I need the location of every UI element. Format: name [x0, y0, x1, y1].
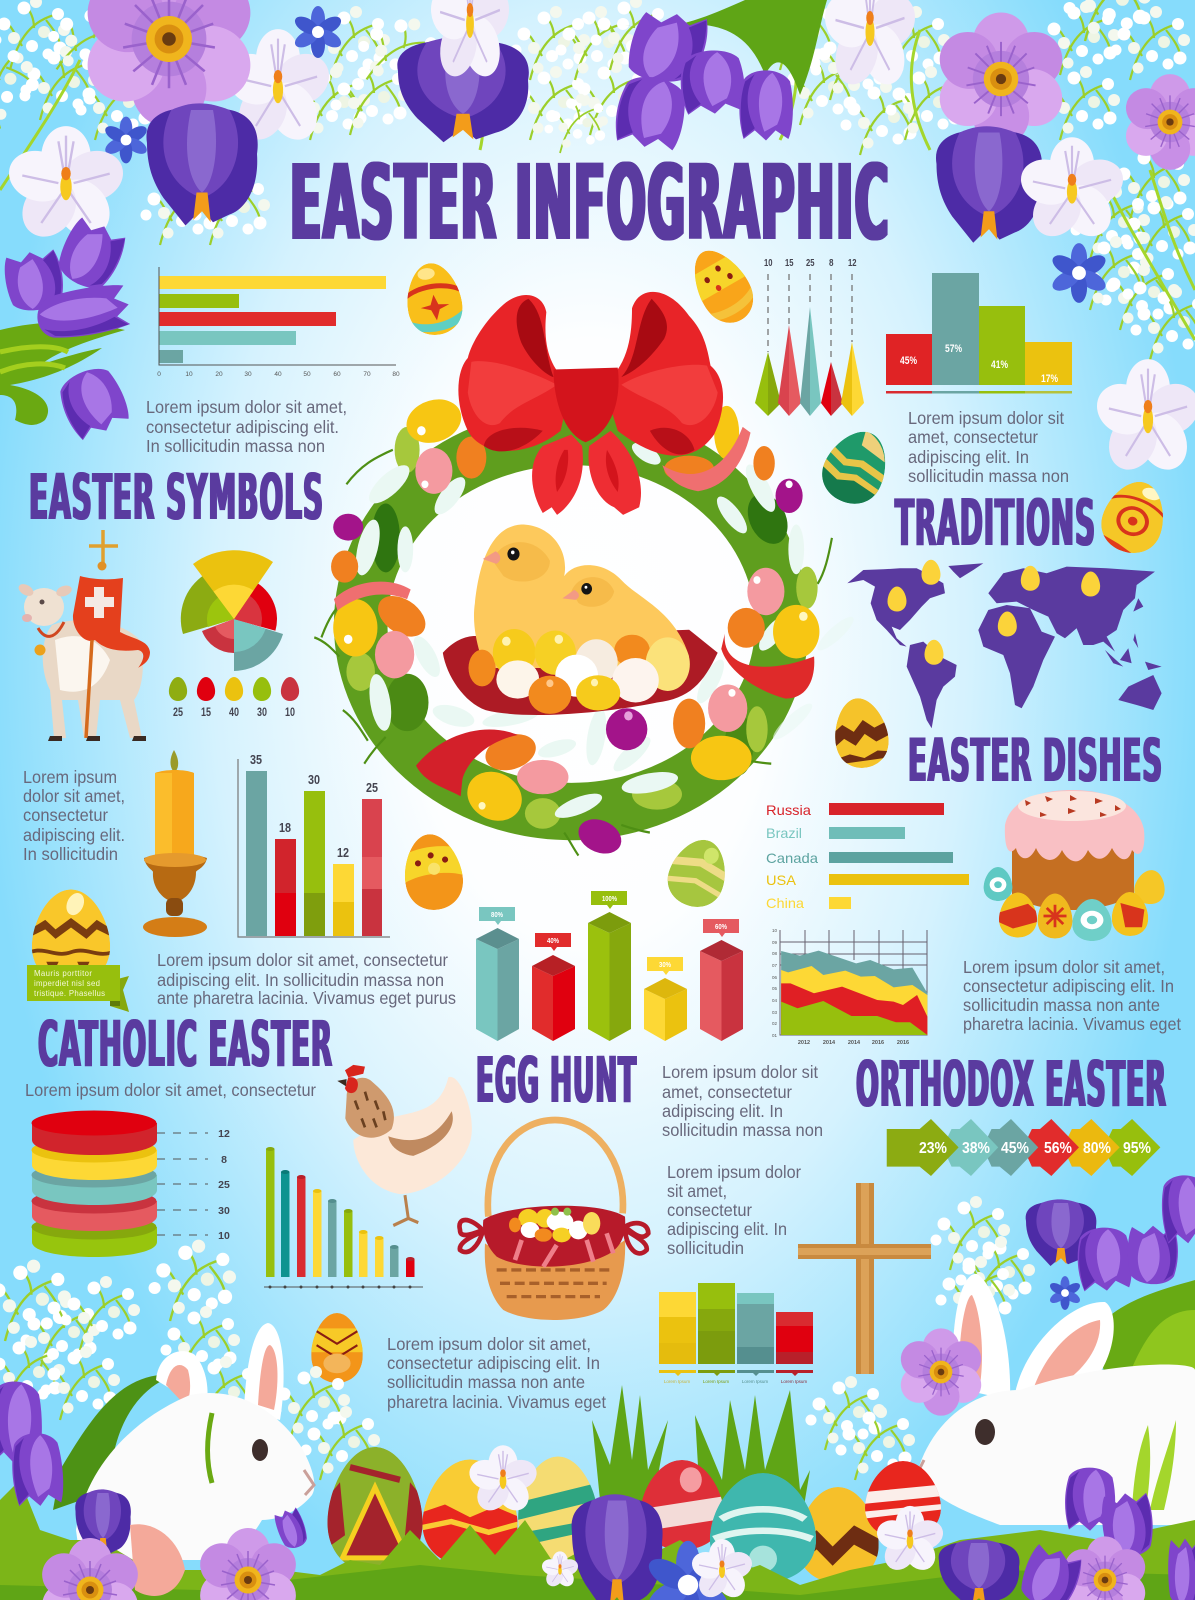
text block: left of candle: adipiscing elit.	[23, 825, 125, 845]
flowers: bottom centre and right	[540, 1468, 1195, 1600]
icon: lamb with banner	[17, 530, 150, 741]
bar chart: top left horizontal bars: 10	[185, 371, 193, 378]
text block: right of area chart: pharetra lacinia. Vivamus eget	[963, 1014, 1181, 1034]
chart: stacked area	[772, 928, 927, 1046]
icon: gold egg with ribbon label: Mauris porttitor	[34, 969, 92, 978]
pie chart	[181, 550, 283, 671]
illustration: easter cake with eggs	[984, 790, 1168, 941]
chart: percentage arrows: 80%	[1083, 1140, 1111, 1157]
bar chart: countries: China	[766, 895, 804, 911]
chart: stacked discs: 30	[218, 1205, 230, 1217]
chart: percentage arrows: 45%	[1001, 1140, 1029, 1157]
chart: stacked area: 2016	[897, 1040, 909, 1046]
bar chart: lower stacked columns: Lorem Ipsum	[742, 1379, 768, 1384]
egg: orange star	[408, 263, 462, 335]
egg: green diamond	[328, 1447, 422, 1573]
text block: right of area chart: Lorem ipsum dolor sit amet,	[963, 957, 1165, 977]
egg: orange flower	[404, 834, 463, 910]
chart: 3D percentage columns	[476, 891, 743, 1041]
chart: stacked area: 10	[772, 928, 777, 933]
chart: percentage arrows	[887, 1119, 1160, 1176]
rabbit: left	[76, 1323, 314, 1560]
bar chart: countries	[766, 802, 969, 911]
lily of the valley: right	[806, 1196, 1035, 1480]
text block: top left: Lorem ipsum dolor sit amet,	[146, 397, 347, 417]
grass band	[0, 1480, 1195, 1600]
text block: top right: amet, consectetur	[908, 427, 1038, 447]
text block: left of candle: In sollicitudin	[23, 844, 118, 864]
pyramid chart: 25	[806, 257, 815, 269]
egg: red	[642, 1460, 722, 1548]
text block: left of candle: Lorem ipsum	[23, 767, 117, 787]
chart: stacked area: 2014	[848, 1040, 861, 1046]
pyramid chart: 12	[848, 257, 857, 269]
text block: beside cross: sit amet,	[667, 1181, 727, 1201]
text block: under candle chart: Lorem ipsum dolor sit amet, consectetur	[157, 950, 448, 970]
egg: yellow red	[422, 1460, 518, 1559]
text block: top right: sollicitudin massa non	[908, 466, 1069, 486]
text block: top left: In sollicitudin massa non	[146, 436, 325, 456]
chart: stacked area: 2016	[872, 1040, 884, 1046]
bar chart: lower stacked columns: Lorem Ipsum	[664, 1379, 690, 1384]
bar chart: percentage blocks: 17%	[1041, 373, 1058, 385]
chart: stacked discs: 10	[218, 1230, 230, 1242]
text block: beside cross: Lorem ipsum dolor	[667, 1162, 801, 1182]
egg: orange dots	[694, 250, 754, 323]
bar chart: five bars with values	[238, 752, 390, 937]
tall grass	[592, 1385, 810, 1530]
bar chart: percentage blocks: 45%	[900, 355, 917, 367]
icon: hen	[337, 1065, 472, 1226]
chart: 3D percentage columns: 40%	[547, 938, 560, 945]
icon: gold egg with ribbon label: tristique. Phasellus	[34, 989, 105, 998]
pyramid chart	[755, 257, 864, 416]
leaves: top centre	[625, 0, 827, 95]
chart: stacked area: 2012	[798, 1040, 810, 1046]
legend: small eggs: 40	[229, 705, 239, 719]
egg: small orange lower left	[310, 1313, 364, 1383]
legend: small eggs: 30	[257, 705, 267, 719]
chart: stacked area: 04	[772, 998, 777, 1003]
chart: 3D percentage columns: 80%	[491, 912, 504, 919]
wreath ring	[361, 436, 782, 812]
bar chart: top left horizontal bars: 50	[303, 371, 311, 378]
text block: right of egg hunt: Lorem ipsum dolor sit	[662, 1062, 818, 1082]
decoration: tulips left	[0, 214, 134, 443]
bar chart: lower stacked columns: Lorem Ipsum	[703, 1379, 729, 1384]
bar chart: countries: USA	[766, 872, 797, 888]
bar chart: lower stacked columns	[659, 1283, 813, 1384]
illustration: basket	[459, 1120, 648, 1320]
egg: brown zigzag	[835, 698, 889, 768]
chart: stacked discs	[32, 1110, 230, 1257]
chart: percentage arrows: 23%	[919, 1140, 947, 1157]
bar chart: top left horizontal bars: 80	[392, 371, 400, 378]
flowers: bottom left	[0, 1382, 311, 1600]
decoration: right flowers	[1049, 243, 1195, 480]
text block: left of candle: consectetur	[23, 805, 108, 825]
chart: stacked area: 01	[772, 1033, 777, 1038]
legend: small eggs	[169, 677, 299, 719]
bar chart: top left horizontal bars: 30	[244, 371, 252, 378]
text: EGG HUNT	[476, 1044, 637, 1117]
white leaves	[351, 438, 857, 823]
flower: white crocus	[465, 1445, 541, 1517]
legend: small eggs: 15	[201, 705, 211, 719]
bar chart: top left horizontal bars: 60	[333, 371, 341, 378]
legend: small eggs: 10	[285, 705, 295, 719]
pyramid chart: 15	[785, 257, 794, 269]
chart: stacked area: 09	[772, 940, 777, 945]
icon: wooden cross	[798, 1183, 931, 1374]
chart: descending thin bars	[264, 1147, 423, 1287]
chart: stacked area: 07	[772, 963, 777, 968]
text block: bottom centre: sollicitudin massa non ante	[387, 1372, 585, 1392]
icon: gold egg with ribbon label	[27, 890, 129, 1012]
text block: right of egg hunt: sollicitudin massa non	[662, 1120, 823, 1140]
chart: stacked area: 02	[772, 1021, 777, 1026]
egg: yellow brown	[804, 1487, 879, 1580]
chicks	[474, 524, 689, 668]
icon: gold egg with ribbon label: imperdiet nisl sed	[34, 979, 100, 988]
bar chart: countries: Canada	[766, 850, 818, 866]
text block: under candle chart: ante pharetra lacinia. Vivamus eget purus	[157, 988, 456, 1008]
legend: small eggs: 25	[173, 705, 183, 719]
chart: 3D percentage columns: 100%	[602, 896, 618, 903]
bar chart: five bars with values: 35	[250, 752, 262, 767]
chart: stacked area: 2014	[823, 1040, 836, 1046]
text block: right of egg hunt: amet, consectetur	[662, 1082, 792, 1102]
text block: left of candle: dolor sit amet,	[23, 786, 125, 806]
decoration: top floral border	[0, 0, 1195, 360]
pyramid chart: 8	[829, 257, 834, 269]
bottom eggs	[328, 1447, 943, 1583]
bar chart: five bars with values: 25	[366, 780, 378, 795]
bar chart: top left horizontal bars: 70	[363, 371, 371, 378]
text block: right of area chart: consectetur adipiscing elit. In	[963, 976, 1174, 996]
bar chart: top left horizontal bars	[157, 267, 400, 378]
text block: beside cross: sollicitudin	[667, 1238, 744, 1258]
bar chart: top left horizontal bars: 40	[274, 371, 282, 378]
text block: beside cross: consectetur	[667, 1200, 752, 1220]
bar chart: countries: Brazil	[766, 825, 802, 841]
chart: 3D percentage columns: 60%	[715, 924, 728, 931]
text block: right of area chart: sollicitudin massa non ante	[963, 995, 1160, 1015]
text block: top right: Lorem ipsum dolor sit	[908, 408, 1064, 428]
egg: green pattern	[822, 432, 886, 504]
eggs in nest	[469, 629, 690, 714]
chart: stacked discs: 12	[218, 1128, 230, 1140]
text block: bottom centre: pharetra lacinia. Vivamus eget	[387, 1392, 606, 1412]
chart: stacked discs: 25	[218, 1179, 230, 1191]
text block: beside cross: adipiscing elit. In	[667, 1219, 787, 1239]
chart: percentage arrows: 38%	[962, 1140, 990, 1157]
illustration: wreath with chicks	[314, 292, 857, 860]
egg: yellow heart	[1101, 482, 1163, 553]
wreath eggs	[331, 393, 819, 860]
egg: teal	[710, 1473, 816, 1583]
bar chart: top left horizontal bars: 20	[215, 371, 223, 378]
chart: stacked area: 06	[772, 975, 777, 980]
chart: stacked area: 08	[772, 951, 777, 956]
chart: percentage arrows: 95%	[1123, 1140, 1151, 1157]
text block: catholic easter intro: Lorem ipsum dolor sit amet, consectetur	[25, 1080, 316, 1100]
chart: stacked area: 05	[772, 986, 777, 991]
chart: stacked area: 03	[772, 1010, 777, 1015]
bar chart: five bars with values: 18	[279, 820, 291, 835]
wreath ribbons	[334, 582, 814, 796]
lily of the valley: left	[0, 1240, 380, 1480]
flowers: right group	[894, 1173, 1195, 1416]
chart: percentage arrows: 56%	[1044, 1140, 1072, 1157]
bar chart: five bars with values: 12	[337, 845, 349, 860]
foliage patches	[314, 427, 832, 856]
eggs: decorated, scattered	[310, 239, 1176, 1383]
leaves: right tulips	[1095, 1280, 1195, 1400]
world map	[847, 560, 1162, 728]
bar chart: top left horizontal bars: 0	[157, 371, 161, 378]
icon: candle	[143, 750, 207, 937]
text block: top right: adipiscing elit. In	[908, 447, 1029, 467]
bar chart: countries: Russia	[766, 802, 811, 818]
rabbit: right	[918, 1274, 1195, 1525]
text block: right of egg hunt: adipiscing elit. In	[662, 1101, 783, 1121]
text block: under candle chart: adipiscing elit. In sollicitudin massa non	[157, 970, 444, 990]
bar chart: percentage blocks: 41%	[991, 359, 1008, 371]
chart: stacked discs: 8	[221, 1154, 227, 1166]
bar chart: five bars with values: 30	[308, 772, 320, 787]
text: EASTER SYMBOLS	[29, 461, 324, 534]
decoration: bottom floral scene	[0, 1173, 1195, 1600]
bar chart: percentage blocks: 57%	[945, 343, 962, 355]
text: CATHOLIC EASTER	[38, 1008, 333, 1081]
egg: olive	[668, 840, 725, 907]
bow	[458, 292, 723, 515]
pyramid chart: 10	[764, 257, 773, 269]
bar chart: lower stacked columns: Lorem Ipsum	[781, 1379, 807, 1384]
leaf: left	[53, 1375, 175, 1510]
text block: bottom centre: Lorem ipsum dolor sit amet,	[387, 1334, 591, 1354]
text block: top left: consectetur adipiscing elit.	[146, 417, 339, 437]
text block: bottom centre: consectetur adipiscing elit. In	[387, 1353, 600, 1373]
red nest cloth	[443, 630, 718, 715]
chart: 3D percentage columns: 30%	[659, 962, 672, 969]
egg: red white	[865, 1461, 941, 1532]
bar chart: percentage blocks	[886, 273, 1072, 394]
egg: yellow green	[516, 1456, 600, 1560]
